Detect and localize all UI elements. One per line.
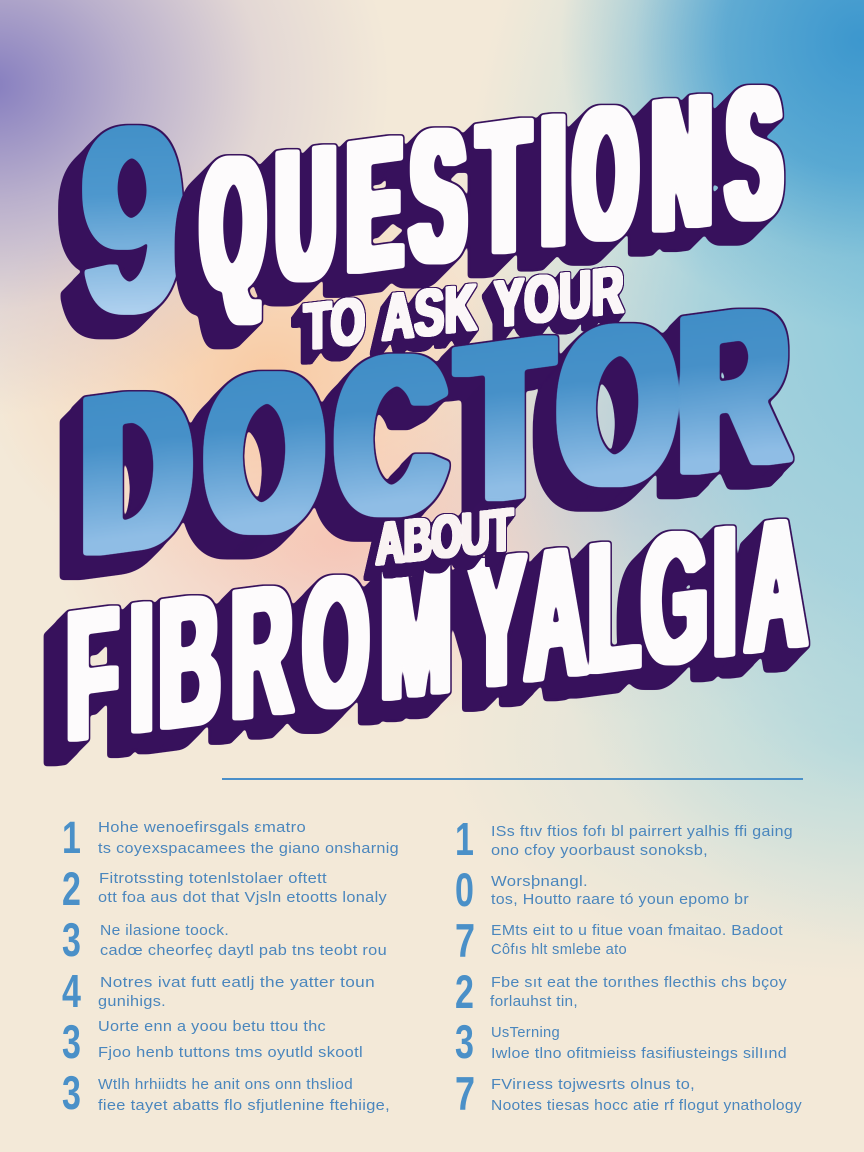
number 0: 0 — [455, 864, 474, 916]
question line: Notres ivat futt eatlj the yatter toun — [100, 974, 375, 991]
question line: Ne ilasione toock. — [100, 922, 229, 939]
divider line — [222, 778, 803, 780]
left column questions — [98, 819, 399, 1114]
number 2: 2 — [62, 863, 81, 915]
title — [66, 45, 807, 780]
title: TO ASK YOUR: TO ASK YOUR — [304, 252, 624, 364]
question line: gunihigs. — [98, 993, 166, 1010]
question line: ono cfoy yoorbaust sonoksb, — [491, 842, 708, 859]
number 3: 3 — [62, 914, 81, 966]
question line: ts coyexspacamees the giano onsharnig — [98, 840, 399, 857]
question line: Côfıs hlt smlebe ato — [491, 941, 627, 958]
right column questions — [490, 823, 802, 1114]
number 4: 4 — [62, 965, 81, 1017]
question line: fiee tayet abatts flo sfjutlenine ftehiige, — [98, 1097, 390, 1114]
question line: FVirıess tojwesrts olnus to, — [491, 1076, 695, 1093]
number 2: 2 — [455, 966, 474, 1018]
question line: ott foa aus dot that Vjsln etootts lonaly — [98, 889, 387, 906]
question line: Hohe wenoefirsgals εmatro — [98, 819, 306, 836]
number 1: 1 — [62, 814, 81, 863]
question line: forlauhst tin, — [490, 993, 578, 1010]
question line: cadœ cheorfeç daytl pab tns teobt rou — [100, 942, 387, 959]
number 3: 3 — [62, 1016, 81, 1068]
right column numbers — [455, 813, 475, 1120]
title: DOCTOR: DOCTOR — [82, 258, 787, 602]
number 7: 7 — [455, 1067, 475, 1120]
left column numbers — [62, 814, 81, 1119]
number 1: 1 — [455, 813, 474, 865]
number 7: 7 — [455, 914, 475, 967]
question line: Uorte enn a yoou betu ttou thc — [98, 1018, 326, 1035]
question line: EMts eiıt to u fitue voan fmaitao. Badoot — [491, 922, 784, 939]
question line: Worsþnangl. — [491, 873, 588, 890]
question line: Nootes tiesas hocc atie rf flogut ynathology — [491, 1097, 802, 1114]
question line: tos, Houtto raare tó youn epomo br — [491, 891, 749, 908]
question line: Fjoo henb tuttons tms oyutld skootl — [98, 1044, 363, 1061]
question line: Wtlh hrhiidts he anit ons onn thsliod — [98, 1076, 353, 1093]
title: number 9: 9 — [80, 71, 186, 368]
question line: UsTerning — [491, 1024, 560, 1041]
question line: Iwloe tlno ofitmieiss fasifiusteings silIınd — [491, 1045, 787, 1062]
number 3: 3 — [455, 1016, 474, 1068]
title: QUESTIONS: QUESTIONS — [202, 45, 781, 333]
title: ABOUT: ABOUT — [376, 495, 513, 578]
question line: Fitrotssting totenlstolaer oftett — [99, 870, 328, 887]
number 3: 3 — [62, 1067, 81, 1119]
question line: ISs ftıv ftios fofı bl pairrert yalhis ffi gaing — [491, 823, 793, 840]
title: FIBROMYALGIA: FIBROMYALGIA — [66, 479, 807, 780]
question line: Fbe sıt eat the torıthes flecthis chs bçoy — [491, 974, 787, 991]
